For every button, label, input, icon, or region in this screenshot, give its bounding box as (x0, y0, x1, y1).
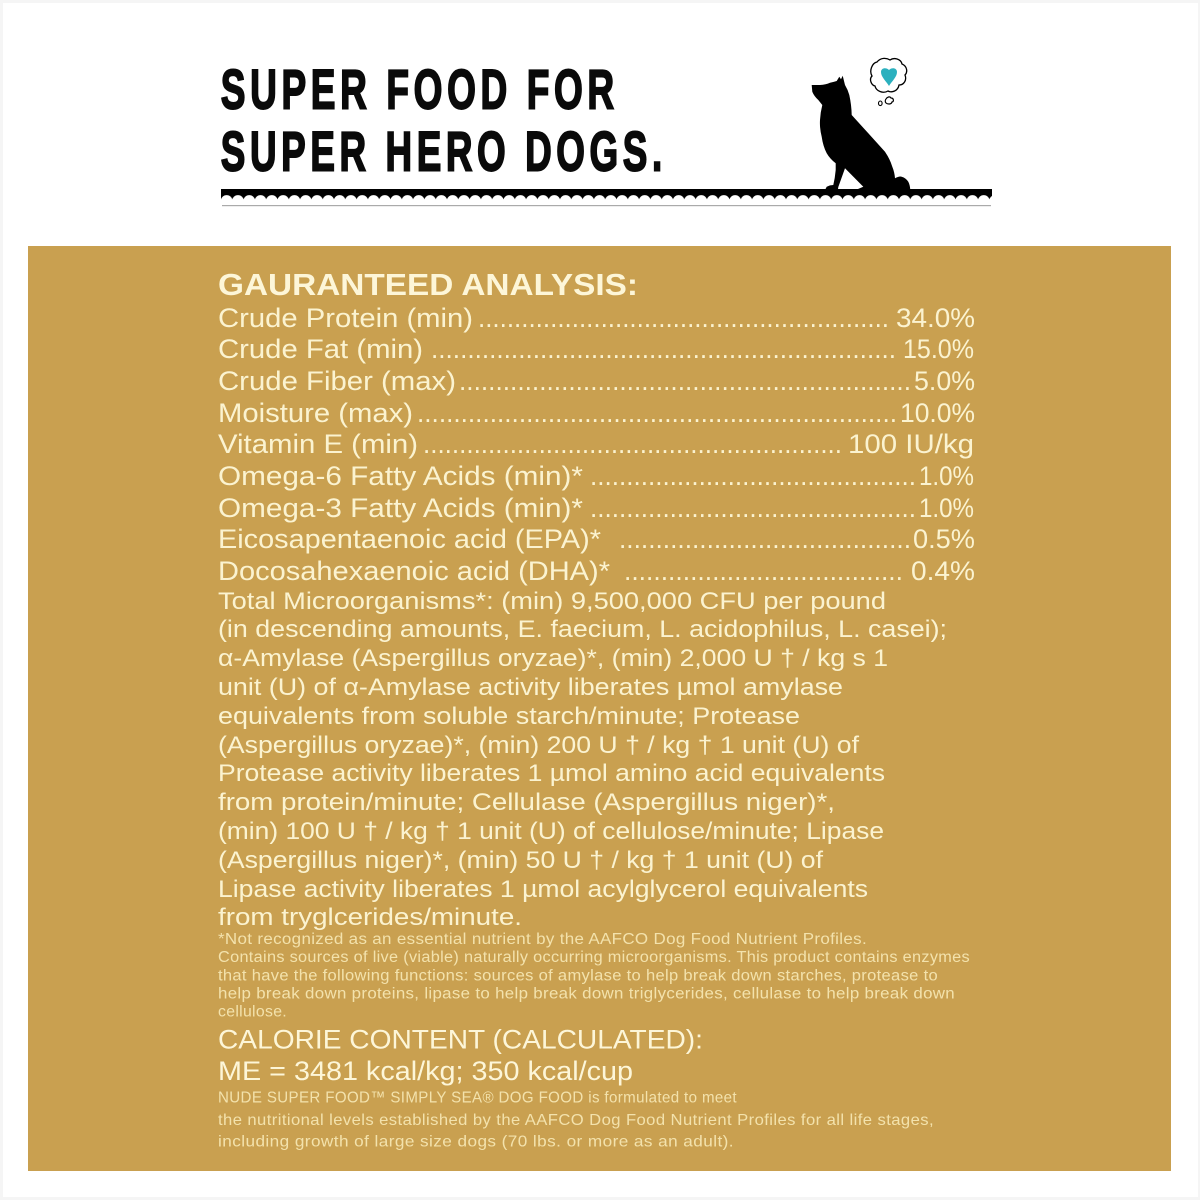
analysis table: 0.4% (911, 556, 975, 586)
analysis table: Vitamin E (min) (218, 429, 418, 459)
text block: microorganisms and enzymes: from tryglcerides/minute. (218, 904, 522, 931)
title (221, 58, 667, 182)
panel: guaranteed analysis (28, 246, 1171, 1171)
header: title and dog illustration (221, 58, 992, 206)
text block: microorganisms and enzymes: unit (U) of α-Amylase activity liberates µmol amylase (218, 674, 843, 701)
analysis table: .................................................................. (417, 398, 897, 428)
text block: microorganisms and enzymes: equivalents from soluble starch/minute; Protease (218, 703, 800, 730)
footnote: cellulose. (218, 1004, 287, 1020)
text block: microorganisms and enzymes: from protein/minute; Cellulase (Aspergillus niger)*, (218, 789, 835, 816)
text block: microorganisms and enzymes: Protease activity liberates 1 µmol amino acid equivalents (218, 760, 885, 787)
analysis table: Eicosapentaenoic acid (EPA)* (218, 524, 602, 554)
title: SUPER HERO DOGS. (221, 119, 667, 182)
text block: microorganisms and enzymes: (Aspergillus oryzae)*, (min) 200 U † / kg † 1 unit (U) of (218, 732, 859, 759)
formulation statement: NUDE SUPER FOOD™ SIMPLY SEA® DOG FOOD is formulated to meet (218, 1090, 737, 1106)
title: SUPER FOOD FOR (221, 58, 619, 120)
text block: microorganisms and enzymes: (Aspergillus niger)*, (min) 50 U † / kg † 1 unit (U) of (218, 847, 823, 874)
analysis table: ............................................. (590, 493, 916, 523)
analysis table: 5.0% (914, 366, 975, 396)
footnote: that have the following functions: sources of amylase to help break down starches, protease to (218, 968, 938, 984)
text block: microorganisms and enzymes: (in descending amounts, E. faecium, L. acidophilus, L. casei); (218, 616, 947, 643)
analysis table: 34.0% (896, 303, 975, 333)
analysis table: Moisture (max) (218, 398, 413, 428)
icon: scalloped ground bar (221, 189, 992, 206)
analysis table: ......................................................... (478, 303, 889, 333)
calorie content: ME = 3481 kcal/kg; 350 kcal/cup (218, 1056, 633, 1086)
analysis table: 1.0% (919, 461, 974, 491)
analysis table: Crude Fiber (max) (218, 366, 456, 396)
analysis table: 10.0% (900, 398, 975, 428)
text block: microorganisms and enzymes: Lipase activity liberates 1 µmol acylglycerol equivalents (218, 876, 868, 903)
text block: microorganisms and enzymes (218, 588, 947, 931)
analysis table: .............................................................. (459, 366, 911, 396)
footnote: *Not recognized as an essential nutrient by the AAFCO Dog Food Nutrient Profiles. (218, 931, 867, 948)
text block: microorganisms and enzymes: Total Microorganisms*: (min) 9,500,000 CFU per pound (218, 588, 886, 615)
analysis table: 15.0% (903, 334, 974, 364)
analysis table: .......................................................... (423, 429, 842, 459)
calorie content (218, 1024, 703, 1086)
analysis table: ............................................. (590, 461, 916, 491)
footnote: Contains sources of live (viable) naturally occurring microorganisms. This product contains enzymes (218, 949, 970, 966)
analysis table: 100 IU/kg (848, 429, 974, 459)
icon: sitting dog silhouette (812, 76, 910, 190)
analysis table: Omega-6 Fatty Acids (min)* (218, 461, 584, 491)
calorie content: CALORIE CONTENT (CALCULATED): (218, 1024, 703, 1054)
analysis table: Crude Fat (min) (218, 334, 423, 364)
analysis table: Omega-3 Fatty Acids (min)* (218, 493, 584, 523)
formulation statement: including growth of large size dogs (70 lbs. or more as an adult). (218, 1134, 734, 1150)
footnote: help break down proteins, lipase to help break down triglycerides, cellulase to help break down (218, 986, 955, 1002)
text block: microorganisms and enzymes: α-Amylase (Aspergillus oryzae)*, (min) 2,000 U † / kg s 1 (218, 645, 888, 672)
analysis table (218, 303, 975, 586)
analysis table: Crude Protein (min) (218, 303, 473, 333)
analysis table: 1.0% (919, 493, 974, 523)
dog leg gap (838, 168, 863, 189)
icon: thought cloud with heart (871, 58, 907, 106)
footnote (218, 931, 970, 1020)
formulation statement (218, 1090, 934, 1150)
heading: guaranteed analysis: GAURANTEED ANALYSIS: (218, 267, 638, 302)
analysis table: 0.5% (913, 524, 975, 554)
analysis table: ...................................... (624, 556, 903, 586)
analysis table: Docosahexaenoic acid (DHA)* (218, 556, 611, 586)
analysis table: ................................................................ (431, 334, 896, 364)
text block: microorganisms and enzymes: (min) 100 U † / kg † 1 unit (U) of cellulose/minute; Lipase (218, 818, 884, 845)
formulation statement: the nutritional levels established by the AAFCO Dog Food Nutrient Profiles for all life stages, (218, 1112, 934, 1129)
analysis table: ........................................ (619, 524, 911, 554)
